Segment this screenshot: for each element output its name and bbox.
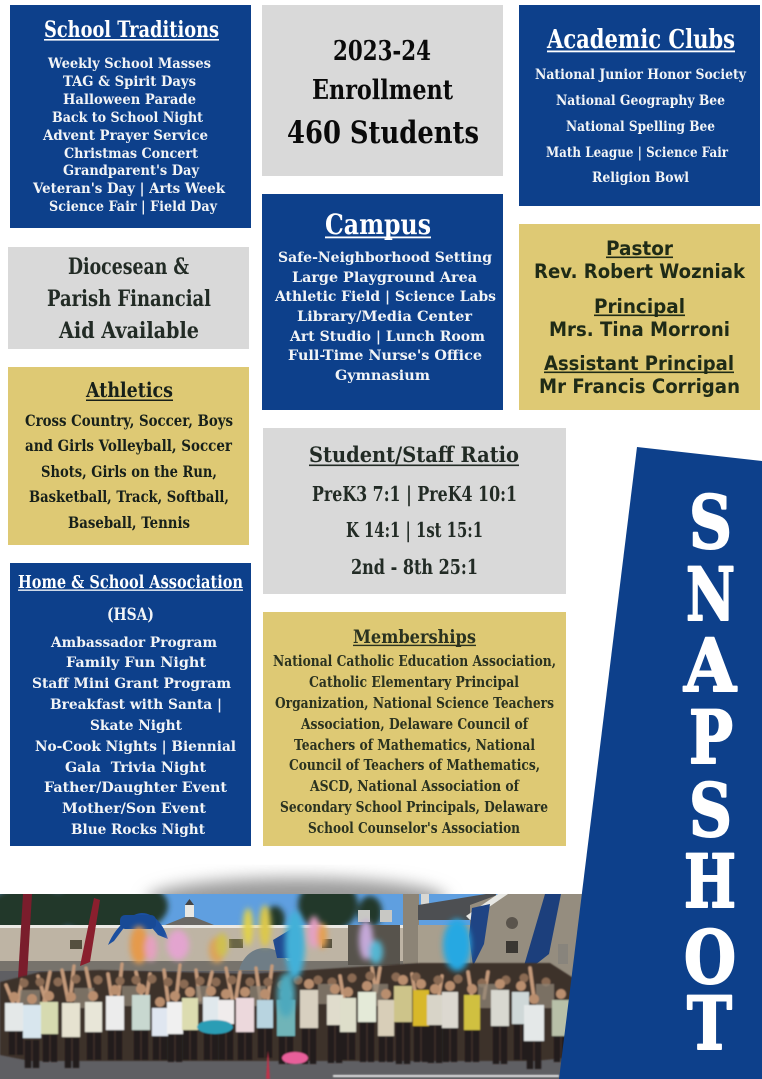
trees	[0, 894, 386, 925]
cupola	[165, 899, 214, 925]
heading: athletics: Athletics	[85, 378, 173, 402]
text: ratios	[312, 482, 517, 579]
text: sports: Basketball, Track, Softball,	[29, 487, 229, 506]
vertical title: SNAPSHOT: S	[689, 768, 732, 854]
list: clubs: National Spelling Bee	[566, 119, 715, 135]
heading: school traditions: School Traditions	[44, 17, 219, 43]
heading: assistant principal: Assistant Principal	[544, 352, 734, 375]
text: memberships list: National Catholic Education Association,	[273, 653, 556, 670]
panel: campus	[262, 194, 503, 410]
panel: enrollment	[262, 5, 503, 176]
list: traditions: Science Fair | Field Day	[49, 199, 218, 215]
list: traditions: Back to School Night	[52, 110, 204, 126]
blue tent and bounce dome	[108, 913, 293, 970]
list: HSA events: Skate Night	[90, 718, 183, 734]
panel: school traditions	[10, 5, 251, 228]
text: pastor name: Rev. Robert Wozniak	[534, 260, 746, 283]
vertical title: SNAPSHOT: T	[687, 981, 732, 1067]
text: financial aid: Diocesean &	[68, 254, 189, 280]
list: traditions: TAG & Spirit Days	[63, 74, 196, 90]
list: traditions: Christmas Concert	[64, 146, 199, 162]
heading: principal: Principal	[594, 295, 685, 318]
text: sports: Cross Country, Soccer, Boys	[25, 411, 233, 430]
text: memberships list: Council of Teachers of Mathematics,	[289, 757, 540, 774]
panel: leadership	[519, 224, 760, 410]
vertical title: SNAPSHOT: S	[689, 480, 732, 566]
photo: students with color powder	[0, 894, 582, 1079]
text: memberships list: Catholic Elementary Principal	[309, 674, 519, 691]
sky	[0, 894, 498, 925]
list: traditions: Weekly School Masses	[47, 56, 211, 72]
text: HSA: (HSA)	[107, 605, 154, 625]
panel: athletics	[8, 367, 249, 545]
text: sports: Shots, Girls on the Run,	[41, 462, 217, 481]
list: HSA events: Ambassador Program	[50, 635, 217, 651]
list: HSA events: Staff Mini Grant Program	[32, 676, 231, 692]
school building	[0, 910, 405, 971]
list: traditions: Halloween Parade	[63, 92, 196, 108]
text: financial aid	[47, 254, 211, 344]
text: memberships list: ASCD, National Association of	[309, 778, 521, 795]
heading: memberships: Memberships	[353, 627, 476, 648]
list: traditions	[32, 56, 226, 215]
heading: student staff ratio: Student/Staff Ratio	[309, 443, 519, 468]
text: sports	[25, 411, 233, 532]
text: memberships list: School Counselor's Association	[308, 820, 520, 837]
text: memberships list: Organization, National Science Teachers	[275, 695, 554, 712]
list: clubs: Religion Bowl	[592, 170, 689, 186]
text: financial aid: Aid Available	[58, 318, 199, 344]
vertical title: SNAPSHOT	[683, 480, 737, 1067]
photo shadow	[147, 878, 447, 922]
text: ratios: 2nd - 8th 25:1	[351, 555, 478, 579]
text: memberships list: Association, Delaware Council of	[300, 716, 529, 733]
text: financial aid: Parish Financial	[47, 286, 211, 312]
crowd	[0, 963, 575, 1079]
panel: student staff ratio	[263, 428, 566, 594]
heading: campus: Campus	[325, 208, 431, 241]
text: sports: Baseball, Tennis	[68, 513, 190, 532]
list: campus	[274, 250, 496, 384]
list: campus: Art Studio | Lunch Room	[289, 329, 485, 345]
list: campus: Full-Time Nurse's Office	[288, 348, 482, 364]
vertical title: SNAPSHOT: H	[684, 839, 736, 925]
panel: financial aid	[8, 247, 249, 349]
list: campus: Safe-Neighborhood Setting	[278, 250, 492, 266]
list: clubs: Math League | Science Fair	[546, 145, 729, 161]
text: assistant principal name: Mr Francis Corrigan	[539, 375, 740, 398]
list: campus: Library/Media Center	[297, 309, 473, 325]
text: memberships list	[273, 653, 556, 837]
color powder clouds	[130, 905, 471, 1017]
vertical title: SNAPSHOT: N	[686, 552, 735, 638]
vertical title: SNAPSHOT: P	[689, 695, 733, 781]
list: clubs: National Geography Bee	[556, 93, 725, 109]
stone building	[403, 894, 582, 984]
heading: home and school association: Home & School Association	[18, 573, 243, 593]
flags	[18, 894, 561, 979]
text: memberships list: Secondary School Principals, Delaware	[280, 799, 548, 816]
list: HSA events	[32, 635, 236, 838]
list: HSA events: Blue Rocks Night	[71, 822, 206, 838]
panel: home and school association	[10, 563, 251, 846]
text: 460 students: 460 Students	[287, 115, 479, 151]
list: HSA events: Mother/Son Event	[62, 801, 207, 817]
list: clubs	[535, 67, 747, 186]
vertical title: SNAPSHOT: O	[684, 915, 736, 1001]
list: HSA events: Breakfast with Santa |	[50, 697, 222, 713]
text: ratios: PreK3 7:1 | PreK4 10:1	[312, 482, 517, 506]
list: campus: Gymnasium	[335, 368, 430, 384]
list: traditions: Advent Prayer Service	[42, 128, 208, 144]
text: enrollment: Enrollment	[312, 75, 453, 106]
list: campus: Athletic Field | Science Labs	[274, 289, 496, 305]
text: 2023-24: 2023-24	[333, 36, 431, 67]
text: memberships list: Teachers of Mathematics, National	[294, 737, 535, 754]
text: ratios: K 14:1 | 1st 15:1	[346, 518, 483, 542]
list: HSA events: Family Fun Night	[66, 655, 207, 671]
snapshot banner	[559, 447, 762, 1079]
text: sports: and Girls Volleyball, Soccer	[25, 436, 233, 455]
panel: memberships	[263, 612, 566, 846]
list: campus: Large Playground Area	[292, 270, 477, 286]
list: HSA events: No-Cook Nights | Biennial	[35, 739, 236, 755]
vertical title: SNAPSHOT: A	[683, 623, 737, 709]
panel: academic clubs	[519, 5, 760, 206]
list: HSA events: Father/Daughter Event	[44, 780, 228, 796]
list: HSA events: Gala Trivia Night	[65, 760, 207, 776]
list: traditions: Grandparent's Day	[63, 163, 200, 179]
text: principal name: Mrs. Tina Morroni	[549, 318, 730, 341]
list: traditions: Veteran's Day | Arts Week	[32, 181, 226, 197]
heading: pastor: Pastor	[606, 237, 673, 260]
